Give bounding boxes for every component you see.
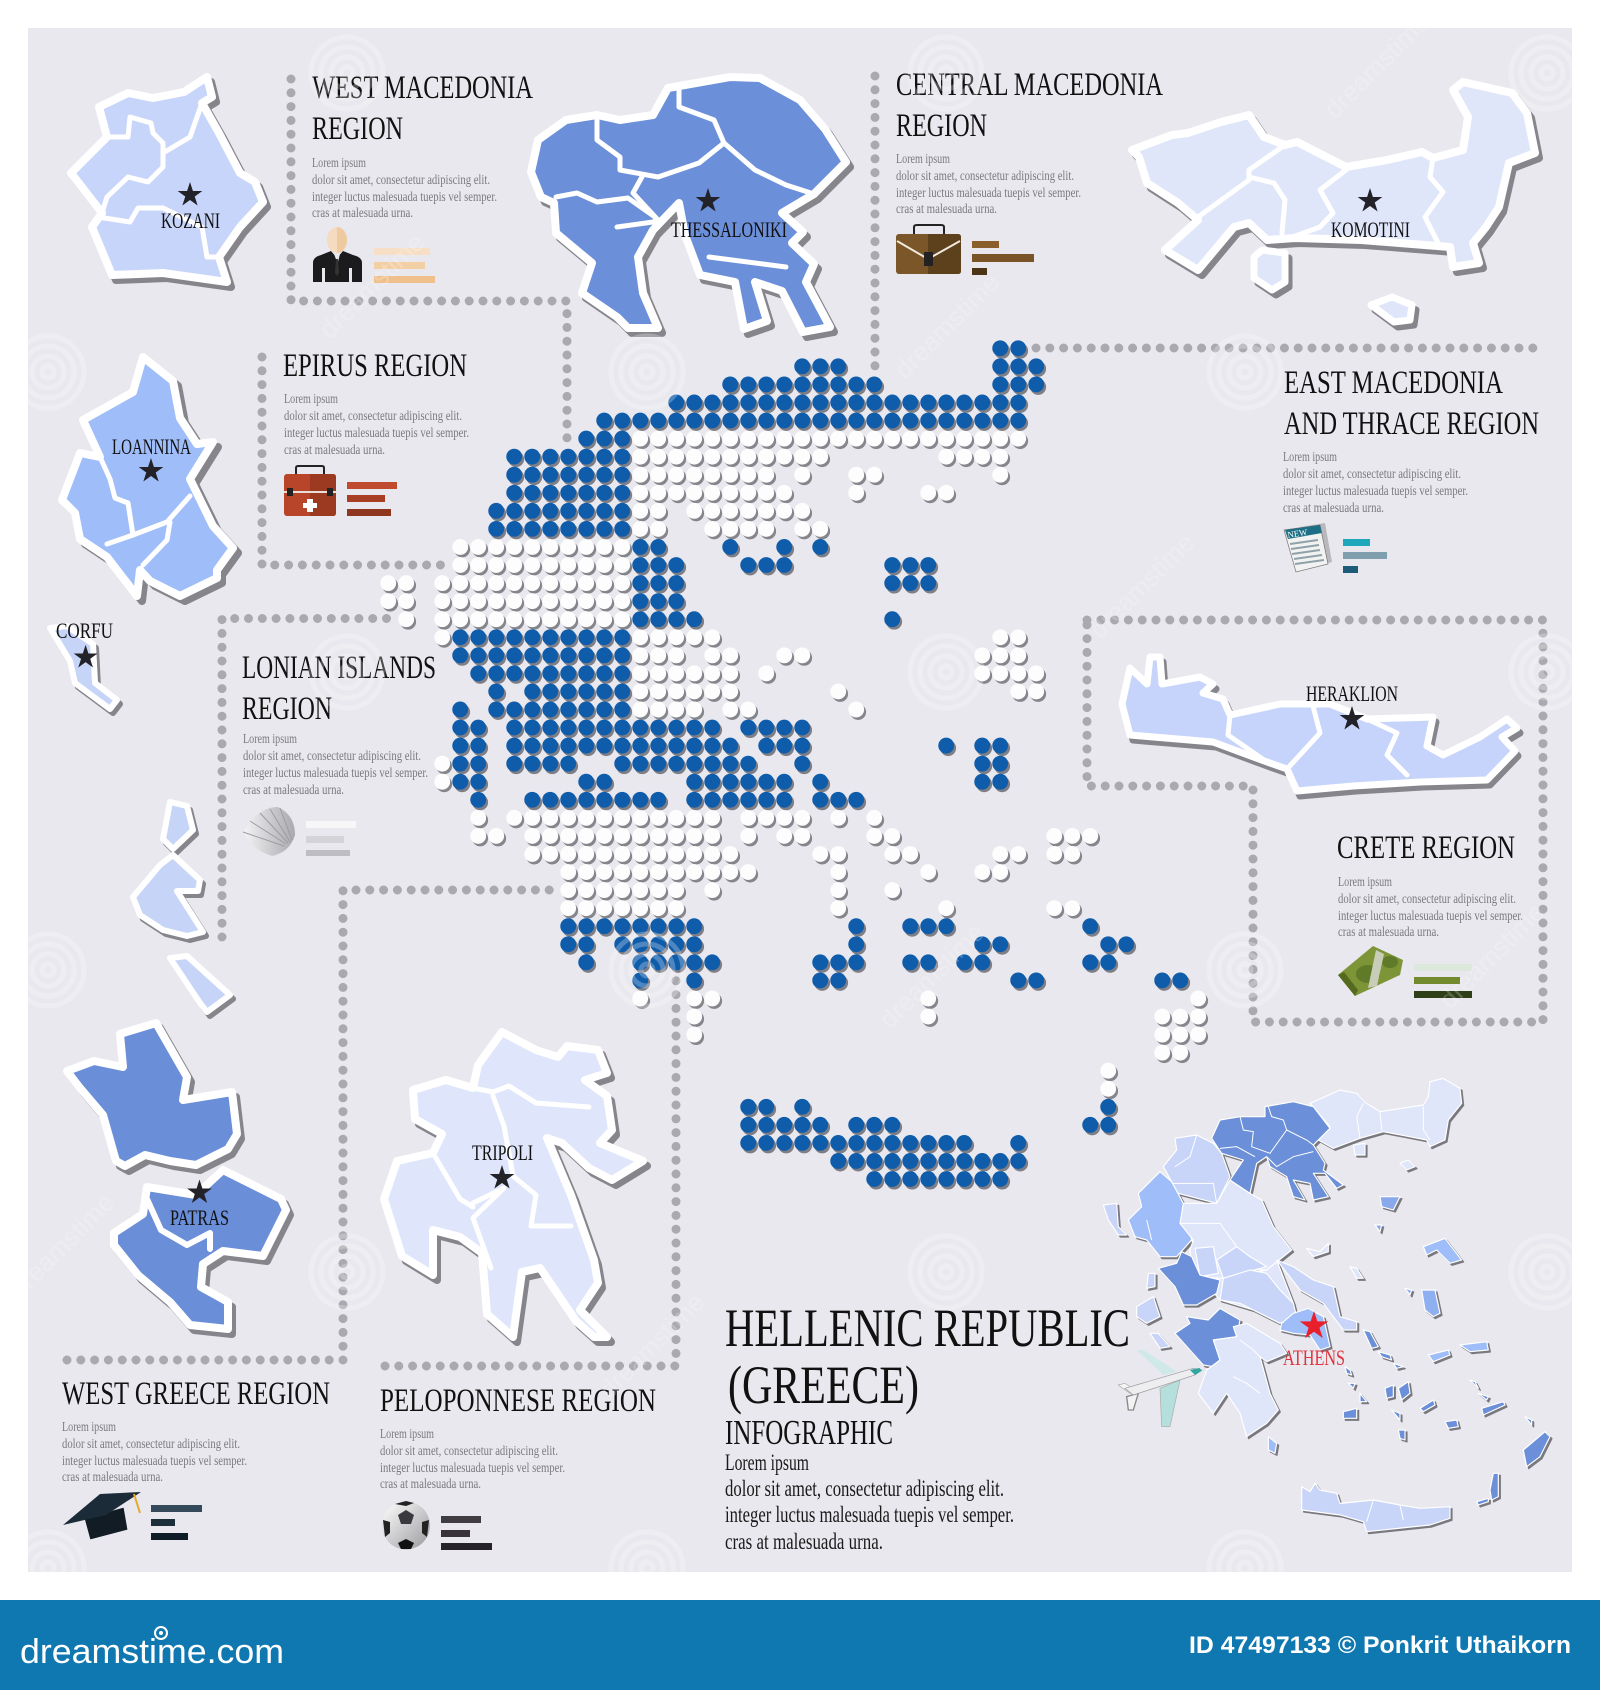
text block: cras at malesuada urna. <box>1283 501 1384 516</box>
text block: dolor sit amet, consectetur adipiscing elit. <box>312 173 490 188</box>
legend bars <box>306 821 356 856</box>
heading: West Macedonia <box>312 70 533 147</box>
watermark swirls: dreamstime <box>888 267 1005 384</box>
text block <box>1338 875 1523 940</box>
text block: cras at malesuada urna. <box>62 1470 163 1485</box>
label: Athens: ATHENS <box>1283 1345 1345 1370</box>
icon: city star Tripoli <box>490 1165 514 1189</box>
label: Heraklion: HERAKLION <box>1306 681 1398 706</box>
watermark swirls: dreamstime <box>593 1287 710 1404</box>
panel: Central Macedonia map <box>531 77 846 332</box>
icon: banknotes <box>1338 946 1403 996</box>
panel: West Macedonia text <box>312 70 533 283</box>
panel: Epirus text <box>283 348 469 516</box>
label: Loannina: LOANNINA <box>112 434 191 459</box>
subtitle: Greece: (GREECE) <box>728 1355 919 1415</box>
heading: Central Macedonia: CENTRAL MACEDONIA <box>896 67 1163 103</box>
heading: East Macedonia and Thrace <box>1284 365 1539 442</box>
text block <box>1283 450 1468 516</box>
text block: dolor sit amet, consectetur adipiscing elit. <box>284 409 462 424</box>
heading: Central Macedonia <box>896 67 1163 144</box>
icon: shell <box>243 807 295 856</box>
text block: dolor sit amet, consectetur adipiscing elit. <box>1283 467 1461 482</box>
text block: Lorem ipsum <box>284 392 338 407</box>
text block: integer luctus malesuada tuepis vel semper. <box>312 190 497 205</box>
icon: Athens star <box>1300 1311 1328 1338</box>
label: Komotini: KOMOTINI <box>1331 217 1410 242</box>
panel: Crete text <box>1337 830 1523 998</box>
text block: dolor sit amet, consectetur adipiscing elit. <box>896 169 1074 184</box>
text block: integer luctus malesuada tuepis vel semper. <box>284 426 469 441</box>
panel: Ionian Islands maps <box>50 618 230 1012</box>
text block <box>284 392 469 458</box>
icon: airplane <box>1118 1350 1202 1427</box>
text block: cras at malesuada urna. <box>896 202 997 217</box>
icon: graduation cap <box>63 1492 141 1540</box>
text block: Lorem ipsum <box>1283 450 1337 465</box>
panel: West Greece text <box>62 1376 330 1540</box>
legend bars <box>1343 539 1387 573</box>
dotted frame lines <box>67 76 1543 1366</box>
text block: integer luctus malesuada tuepis vel semper. <box>1338 909 1523 924</box>
icon: city star Thessaloniki <box>696 188 720 212</box>
text block: Lorem ipsum <box>380 1427 434 1442</box>
panel: East Macedonia and Thrace map <box>1132 82 1535 322</box>
text block: integer luctus malesuada tuepis vel semper. <box>1283 484 1468 499</box>
icon: briefcase <box>896 225 961 274</box>
heading: West Macedonia: WEST MACEDONIA <box>312 70 533 106</box>
subtitle: Infographic: INFOGRAPHIC <box>725 1413 893 1452</box>
text block <box>312 156 497 221</box>
text block: dolor sit amet, consectetur adipiscing elit. <box>243 749 421 764</box>
text block: Lorem ipsum <box>896 152 950 167</box>
watermark swirls: dreamstime <box>1083 527 1200 644</box>
text block: integer luctus malesuada tuepis vel semper. <box>380 1461 565 1476</box>
icon: medical kit <box>284 466 336 516</box>
heading: Epirus: EPIRUS REGION <box>283 348 467 384</box>
text block <box>380 1427 565 1492</box>
text block: cras at malesuada urna. <box>380 1477 481 1492</box>
label: Patras: PATRAS <box>170 1205 229 1230</box>
panel: West Macedonia map <box>71 77 263 282</box>
text block: dolor sit amet, consectetur adipiscing elit. <box>62 1437 240 1452</box>
text block: Lorem ipsum <box>62 1420 116 1435</box>
watermark swirls: dreamstime <box>3 1187 120 1304</box>
national map of Greece <box>1103 1078 1550 1532</box>
text block: cras at malesuada urna. <box>284 443 385 458</box>
label: Tripoli: TRIPOLI <box>472 1140 533 1165</box>
text block: dolor sit amet, consectetur adipiscing elit. <box>725 1476 1004 1501</box>
text block: integer luctus malesuada tuepis vel semper. <box>243 766 428 781</box>
text block: cras at malesuada urna. <box>1338 925 1439 940</box>
panel: Ionian Islands text <box>242 650 436 856</box>
heading: Crete: CRETE REGION <box>1337 830 1515 866</box>
image credit: ID 47497133 © Ponkrit Uthaikorn <box>1189 1632 1571 1659</box>
legend bars <box>151 1505 202 1540</box>
panel: West Greece map <box>67 1023 286 1329</box>
text block <box>725 1450 1014 1554</box>
text block: dolor sit amet, consectetur adipiscing elit. <box>380 1444 558 1459</box>
legend bars <box>972 241 1034 275</box>
icon: newspaper: NEW <box>1287 527 1309 540</box>
heading: West Macedonia: REGION <box>312 111 403 147</box>
icon: city star Corfu <box>74 645 97 668</box>
panel: East Macedonia and Thrace text <box>1283 365 1539 573</box>
heading: Ionian Islands: LONIAN ISLANDS <box>242 650 436 686</box>
text block: Lorem ipsum <box>312 156 366 171</box>
heading: Central Macedonia: REGION <box>896 108 987 144</box>
heading: Ionian Islands <box>242 650 436 727</box>
main title block <box>725 1298 1130 1554</box>
icon: soccer ball <box>382 1501 430 1550</box>
white dots <box>388 439 1200 1091</box>
watermark swirls: dreamstime <box>1318 7 1435 124</box>
text block: integer luctus malesuada tuepis vel semper. <box>62 1454 247 1469</box>
icon: city star Ioannina <box>139 458 163 482</box>
watermark swirls: dreamstime <box>873 917 990 1034</box>
text block <box>243 732 428 798</box>
text block: cras at malesuada urna. <box>312 206 413 221</box>
legend bars <box>1414 964 1472 998</box>
panel: Peloponnese map <box>384 1032 643 1337</box>
icon: city star Komotini <box>1358 188 1382 212</box>
watermark swirls: dreamstime <box>313 227 430 344</box>
dot matrix map of Greece <box>388 348 1200 1182</box>
label: Corfu: CORFU <box>56 618 113 643</box>
icon: city star Kozani <box>178 182 202 206</box>
text block: Lorem ipsum <box>725 1450 809 1475</box>
logo: dreamstime.com: dreamstime.com <box>20 1633 284 1671</box>
panel: Crete map <box>1122 657 1517 791</box>
label: Kozani: KOZANI <box>161 208 220 233</box>
watermark swirls: dreamstime <box>1433 897 1550 1014</box>
text block: cras at malesuada urna. <box>243 783 344 798</box>
panel: Epirus map <box>62 357 233 596</box>
heading: Ionian Islands: REGION <box>242 691 332 727</box>
text block <box>896 152 1081 217</box>
text block: integer luctus malesuada tuepis vel semper. <box>896 186 1081 201</box>
heading: West Greece: WEST GREECE REGION <box>62 1376 330 1412</box>
panel: Peloponnese text <box>380 1383 656 1550</box>
title: HELLENIC REPUBLIC <box>725 1298 1130 1358</box>
text block <box>62 1420 247 1485</box>
legend bars <box>374 248 435 283</box>
icon: businessman <box>313 227 362 282</box>
icon: city star Heraklion <box>1340 706 1364 730</box>
legend bars <box>441 1516 492 1550</box>
text block: Lorem ipsum <box>1338 875 1392 890</box>
heading: East Macedonia and Thrace: EAST MACEDONIA <box>1284 365 1503 401</box>
legend bars <box>347 482 397 516</box>
icon: city star Patras <box>187 1180 212 1203</box>
text block: dolor sit amet, consectetur adipiscing elit. <box>1338 892 1516 907</box>
text block: Lorem ipsum <box>243 732 297 747</box>
icon: newspaper <box>1284 523 1332 572</box>
heading: Peloponnese: PELOPONNESE REGION <box>380 1383 656 1419</box>
panel: Central Macedonia text <box>896 67 1163 275</box>
footer bar <box>0 1600 1600 1690</box>
label: Thessaloniki: THESSALONIKI <box>671 217 787 242</box>
text block: integer luctus malesuada tuepis vel semper. <box>725 1502 1014 1527</box>
text block: cras at malesuada urna. <box>725 1529 883 1554</box>
blue dots <box>460 348 1182 1182</box>
